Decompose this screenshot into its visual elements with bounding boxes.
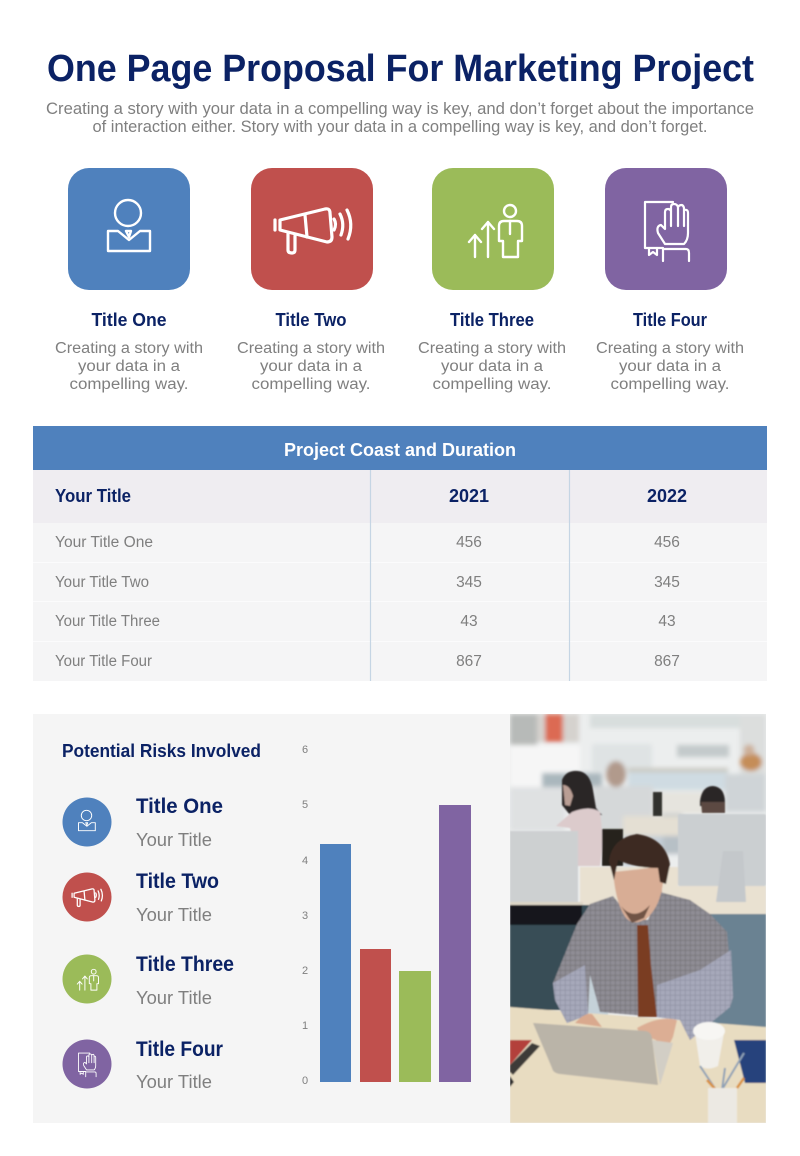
feature four text	[596, 340, 744, 393]
feature three text: compelling way.	[432, 376, 552, 393]
table header row: 2022	[647, 486, 687, 506]
icon: growth tile	[432, 168, 554, 290]
neck	[644, 890, 662, 921]
chart bars	[320, 805, 471, 1082]
background man	[700, 786, 725, 806]
feature two text	[237, 340, 385, 393]
feature one text: compelling way.	[70, 376, 188, 393]
table rows: 456	[654, 534, 680, 551]
feature two title: Title Two	[276, 310, 346, 330]
notebook	[734, 1040, 766, 1083]
risk one	[62, 795, 223, 850]
risk four: Title Four	[136, 1038, 223, 1061]
hair	[609, 834, 670, 884]
feature two text: Creating a story with	[237, 340, 385, 357]
risk two: Your Title	[136, 904, 212, 925]
chart axis labels	[302, 744, 308, 1087]
feature two text: your data in a	[260, 358, 362, 375]
feature one text: Creating a story with	[55, 340, 203, 357]
feature three text: Creating a story with	[418, 340, 566, 357]
monitor	[678, 814, 766, 886]
table rows: 456	[456, 534, 482, 551]
feature four title: Title Four	[633, 310, 707, 330]
subtitle: of interaction either. Story with your data in a compelling way is key, and don’t forget.	[92, 118, 708, 136]
table header row: Your Title	[55, 486, 131, 506]
table: project cost and duration	[33, 426, 767, 681]
chart axis labels: 4	[302, 855, 308, 867]
table rows: 345	[456, 574, 482, 591]
risk two	[62, 870, 219, 925]
icon: oath tile	[605, 168, 727, 290]
chart axis labels: 2	[302, 965, 308, 977]
red folder	[510, 1040, 532, 1065]
risk four: Your Title	[136, 1071, 212, 1092]
risk one: Your Title	[136, 829, 212, 850]
face	[613, 866, 664, 922]
bar chart	[302, 744, 471, 1087]
subtitle	[46, 100, 754, 136]
table rows: 43	[460, 613, 478, 630]
risk three: Your Title	[136, 987, 212, 1008]
chair gap	[587, 978, 608, 1015]
chart axis labels: 5	[302, 799, 308, 811]
pencil cup	[700, 1053, 744, 1090]
feature one text	[55, 340, 203, 393]
feature one text: your data in a	[78, 358, 180, 375]
hands	[575, 1014, 602, 1027]
desk	[580, 867, 766, 914]
feature four text: Creating a story with	[596, 340, 744, 357]
laptop	[533, 1023, 658, 1085]
left partition	[510, 831, 578, 902]
panel: feature one	[55, 168, 203, 393]
chart axis labels: 3	[302, 910, 308, 922]
feature four text: your data in a	[619, 358, 721, 375]
table rows: 867	[456, 653, 482, 670]
table rows: Your Title Four	[55, 653, 152, 670]
table rows: Your Title One	[55, 534, 153, 551]
chart axis labels: 1	[302, 1020, 308, 1032]
panel: feature three	[418, 168, 566, 393]
tie	[637, 925, 657, 1017]
table header row: 2021	[449, 486, 489, 506]
risk two: Title Two	[136, 870, 219, 893]
background woman	[562, 771, 602, 815]
shirt lower sleeve	[657, 950, 733, 1040]
risks heading: Potential Risks Involved	[62, 740, 261, 761]
table heading: Project Coast and Duration	[284, 440, 516, 460]
icon: person tile	[68, 168, 190, 290]
panel: feature two	[237, 168, 385, 393]
table top	[510, 1007, 766, 1123]
risk four	[62, 1038, 223, 1092]
photo: man working on laptop in office	[510, 714, 766, 1123]
table rows	[55, 534, 680, 670]
chart axis labels: 6	[302, 744, 308, 756]
feature three text	[418, 340, 566, 393]
table rows: Your Title Two	[55, 574, 149, 591]
feature four text: compelling way.	[610, 376, 730, 393]
risk three: Title Three	[136, 953, 234, 976]
risk one: Title One	[136, 795, 223, 818]
feature three title: Title Three	[450, 310, 534, 330]
subtitle: Creating a story with your data in a compelling way is key, and don’t forget about the importance	[46, 100, 754, 118]
risk three	[62, 953, 234, 1008]
table header row	[55, 486, 687, 506]
floor	[510, 905, 590, 1010]
panel: potential risks	[33, 714, 510, 1123]
title: One Page Proposal For Marketing Project	[47, 48, 754, 90]
shirt	[552, 892, 729, 1016]
icon: megaphone tile	[251, 168, 373, 290]
feature two text: compelling way.	[252, 376, 370, 393]
panel: feature four	[596, 168, 744, 393]
feature three text: your data in a	[441, 358, 543, 375]
coffee cup	[695, 1033, 724, 1068]
table rows: 867	[654, 653, 680, 670]
table rows: Your Title Three	[55, 613, 160, 630]
chart axis labels: 0	[302, 1075, 308, 1087]
table rows: 43	[658, 613, 676, 630]
table rows: 345	[654, 574, 680, 591]
feature one title: Title One	[92, 310, 166, 330]
